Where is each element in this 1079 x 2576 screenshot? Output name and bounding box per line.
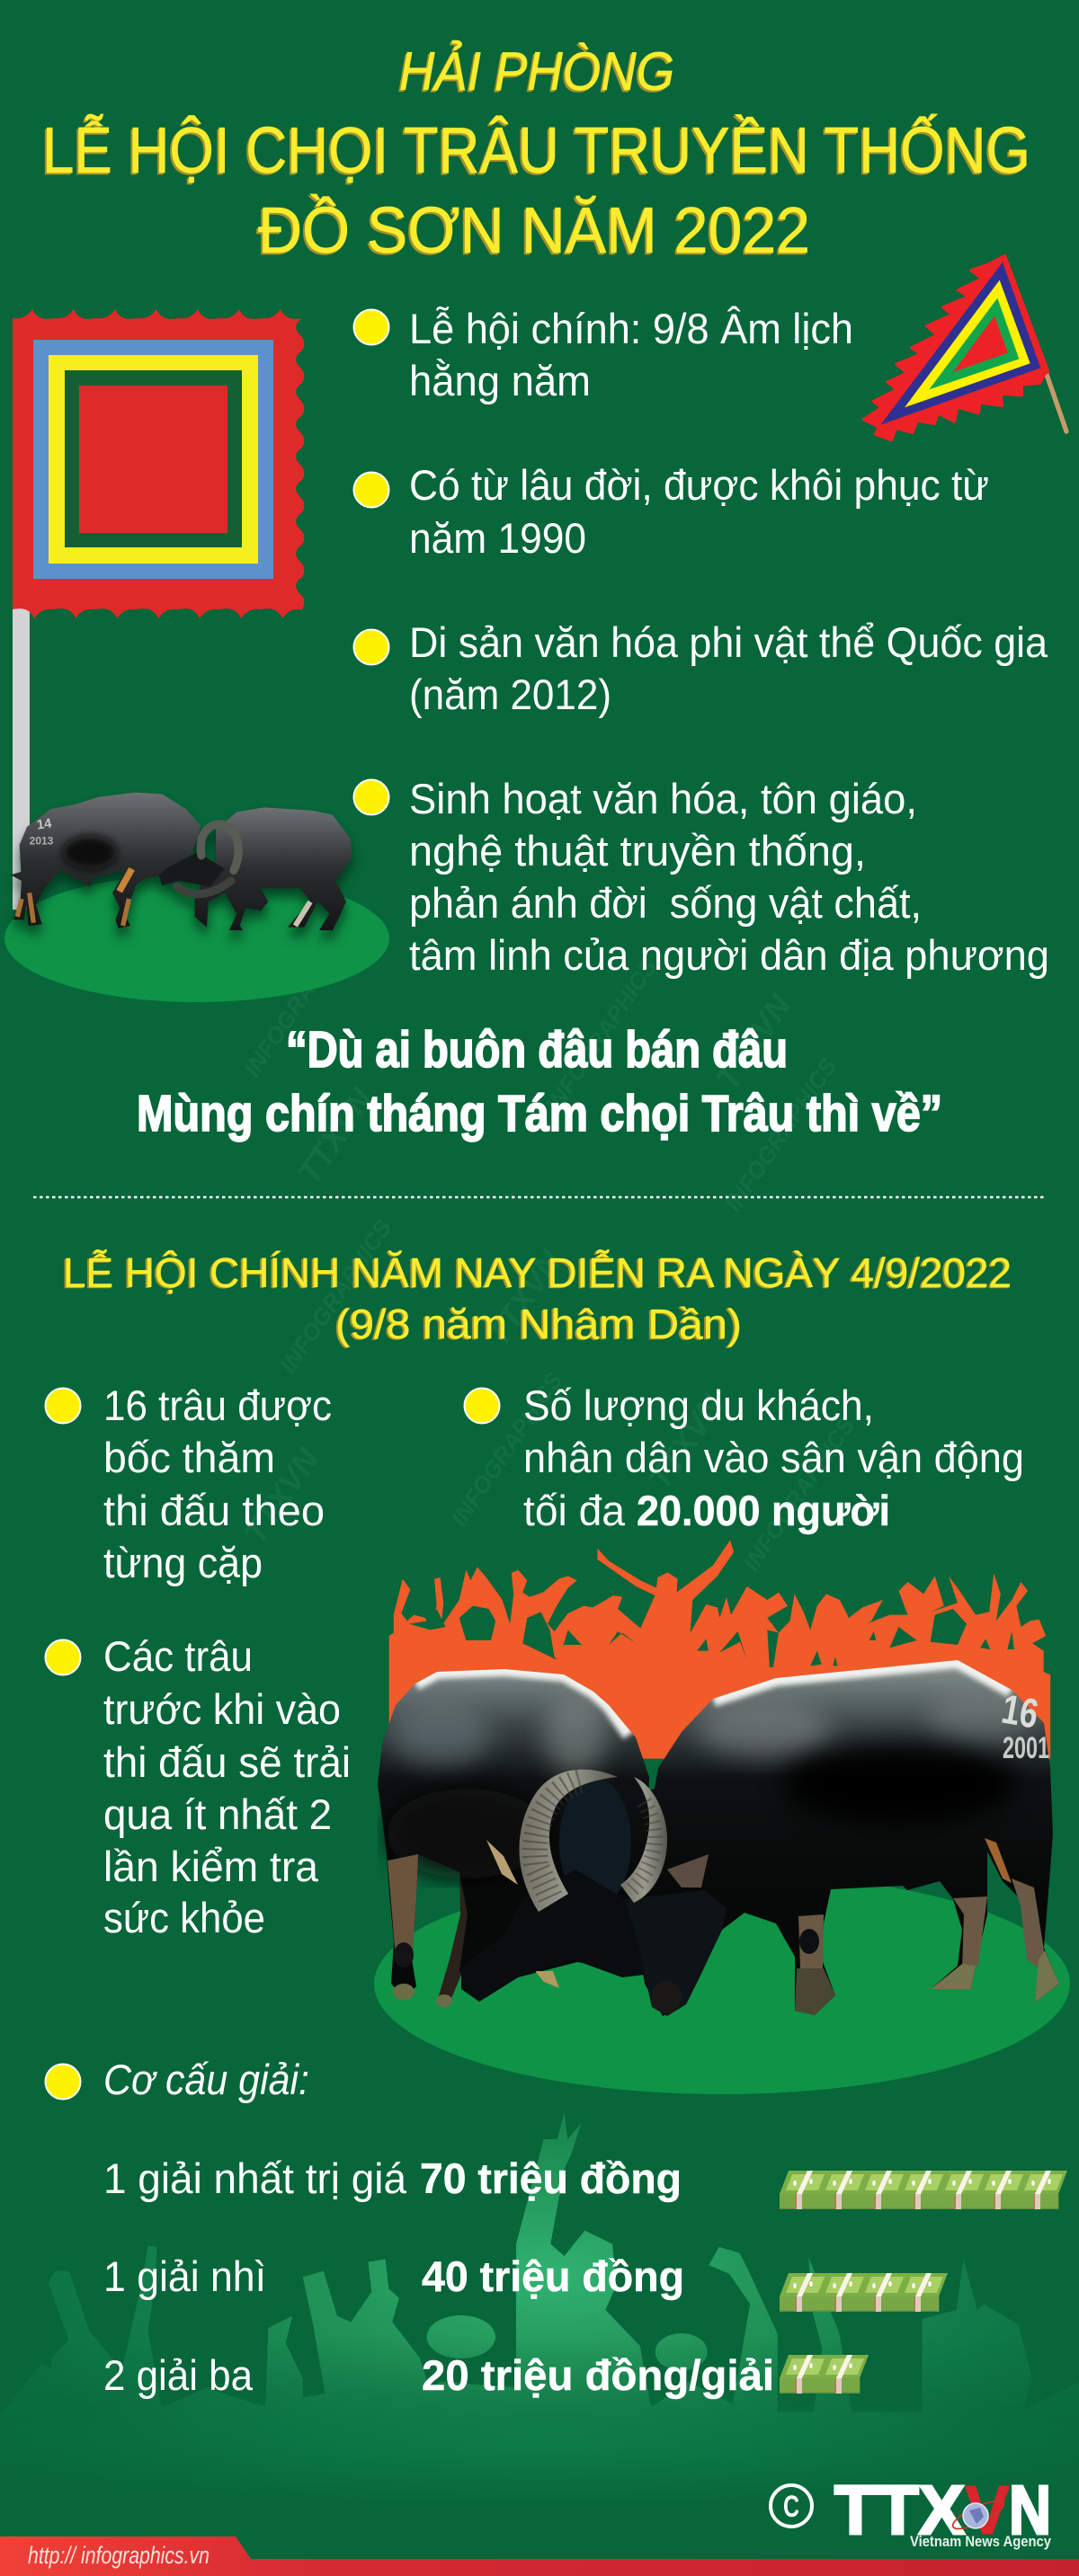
logo: copyright TTXVN: Vietnam News Agency [910, 2533, 1051, 2550]
left large buffalo [378, 1669, 649, 2007]
proverb quote: Mùng chín tháng Tám chọi Trâu thì về” [137, 1085, 942, 1142]
bullet: national heritage [354, 618, 1048, 718]
watermarks: TTXVN [236, 1441, 326, 1550]
bullet: health checks: trước khi vào [103, 1685, 341, 1733]
watermarks: INFOGRAPHICS [737, 1412, 861, 1576]
bullet: national heritage: Di sản văn hóa phi vật thể Quốc gia [409, 618, 1048, 666]
buffalo heads and horns [461, 1770, 727, 2016]
bullet: main festival date [354, 305, 853, 404]
prize row: third prize: 2 giải ba [103, 2351, 254, 2399]
bullet: cultural activity: phản ánh đời sống vật chất, [409, 879, 922, 927]
watermarks [236, 918, 861, 1576]
bullet: 16 buffaloes [45, 1381, 332, 1586]
prize row: first prize: 70 triệu đồng [420, 2154, 682, 2202]
bullet: cultural activity: Sinh hoạt văn hóa, tôn giáo, [409, 775, 917, 822]
section heading: main festival this year: LỄ HỘI CHÍNH NĂM NAY DIỄN RA NGÀY 4/9/2022 [63, 1249, 1012, 1296]
logo: copyright TTXVN: N [1009, 2472, 1051, 2549]
bullet: visitor capacity: tối đa [523, 1487, 626, 1534]
illustration: small buffalo fight on green: 2013 [30, 834, 54, 847]
bullet: health checks: thi đấu sẽ trải [103, 1738, 351, 1786]
footer red band: http:// infographics.vn [28, 2542, 210, 2569]
title: Hai Phong: HẢI PHÒNG [399, 40, 674, 102]
bullet: cultural activity [354, 775, 1049, 979]
bullet: restored since 1990 [354, 461, 989, 562]
bullet: 16 buffaloes: bốc thăm [103, 1434, 275, 1481]
number marks on flank: 16 [998, 1685, 1042, 1737]
title: festival name line 2: ĐỒ SƠN NĂM 2022 [258, 194, 810, 267]
prize row: first prize [103, 2154, 1067, 2209]
proverb quote: “Dù ai buôn đâu bán đâu [286, 1021, 788, 1079]
watermarks: INFOGRAPHICS [238, 918, 361, 1081]
watermarks: TTXVN [479, 1243, 569, 1352]
logo: copyright TTXVN: V [965, 2472, 1010, 2549]
right large buffalo [629, 1660, 1059, 2016]
bullet: visitor capacity: Số lượng du khách, [523, 1381, 874, 1429]
bullet: prize structure heading: Cơ cấu giải: [103, 2056, 309, 2103]
proverb quote [137, 1021, 942, 1142]
bullet: health checks: sức khỏe [103, 1894, 265, 1941]
watermarks: INFOGRAPHICS [274, 1214, 397, 1378]
section heading: main festival this year [63, 1249, 1012, 1347]
prize row: third prize [103, 2351, 869, 2399]
watermarks: TTXVN [641, 1387, 731, 1496]
bullet: visitor capacity [464, 1381, 1024, 1534]
grass ellipse [374, 1873, 1070, 2094]
watermarks: TTXVN [290, 1081, 380, 1190]
bullet: 16 buffaloes: 16 trâu được [103, 1381, 332, 1429]
section heading: main festival this year: (9/8 năm Nhâm Dần) [335, 1301, 742, 1347]
watermarks: INFOGRAPHICS [445, 1367, 568, 1531]
prize row: second prize [103, 2252, 948, 2312]
bullet: cultural activity: tâm linh của người dân địa phương [409, 931, 1049, 979]
bullet: restored since 1990: Có từ lâu đời, được khôi phục từ [409, 461, 989, 509]
logo: copyright TTXVN [771, 2472, 1051, 2550]
logo: copyright TTXVN: C [783, 2490, 799, 2524]
prize row: second prize: 40 triệu đồng [422, 2252, 684, 2300]
bullet list: festival facts [354, 305, 1049, 979]
bullet: main festival date: hằng năm [409, 357, 591, 404]
icon: triangular festival flag [863, 255, 1066, 440]
right large buffalo: 2001 [1003, 1731, 1049, 1765]
watermarks: TTXVN [709, 987, 798, 1096]
orange cheering crowd [389, 1540, 1050, 1759]
logo: copyright TTXVN: TTX [834, 2472, 965, 2549]
icon: festival square flag [13, 309, 304, 910]
watermarks: INFOGRAPHICS [719, 1053, 843, 1216]
bullet: national heritage: (năm 2012) [409, 671, 611, 718]
bullet: health checks [45, 1632, 351, 1941]
watermarks: INFOGRAPHICS [540, 954, 663, 1117]
prize row: second prize: 1 giải nhì [103, 2252, 266, 2300]
bullet: health checks: Các trâu [103, 1632, 253, 1680]
bullet: 16 buffaloes: từng cặp [103, 1539, 263, 1586]
bullet: main festival date: Lễ hội chính: 9/8 Âm lịch [409, 305, 853, 352]
bullet: restored since 1990: năm 1990 [409, 514, 586, 562]
illustration: small buffalo fight on green [4, 793, 389, 1002]
footer red band [0, 2536, 1079, 2576]
decorative crowd silhouette behind prizes [0, 2112, 1079, 2526]
prize row: first prize: 1 giải nhất trị giá [103, 2154, 407, 2202]
bullet: health checks: lần kiểm tra [103, 1843, 319, 1890]
bullet: health checks: qua ít nhất 2 [103, 1790, 332, 1838]
prize structure [45, 2056, 1067, 2399]
bullet: visitor capacity: nhân dân vào sân vận động [523, 1434, 1024, 1481]
bullet: cultural activity: nghệ thuật truyền thống, [409, 827, 866, 875]
illustration: small buffalo fight on green: 14 [36, 816, 53, 833]
prize row: third prize: 20 triệu đồng/giải [422, 2351, 774, 2399]
bullet: visitor capacity: 20.000 người [637, 1487, 890, 1534]
bullet: 16 buffaloes: thi đấu theo [103, 1487, 325, 1534]
illustration: large buffalo fight with crowd [374, 1540, 1070, 2094]
